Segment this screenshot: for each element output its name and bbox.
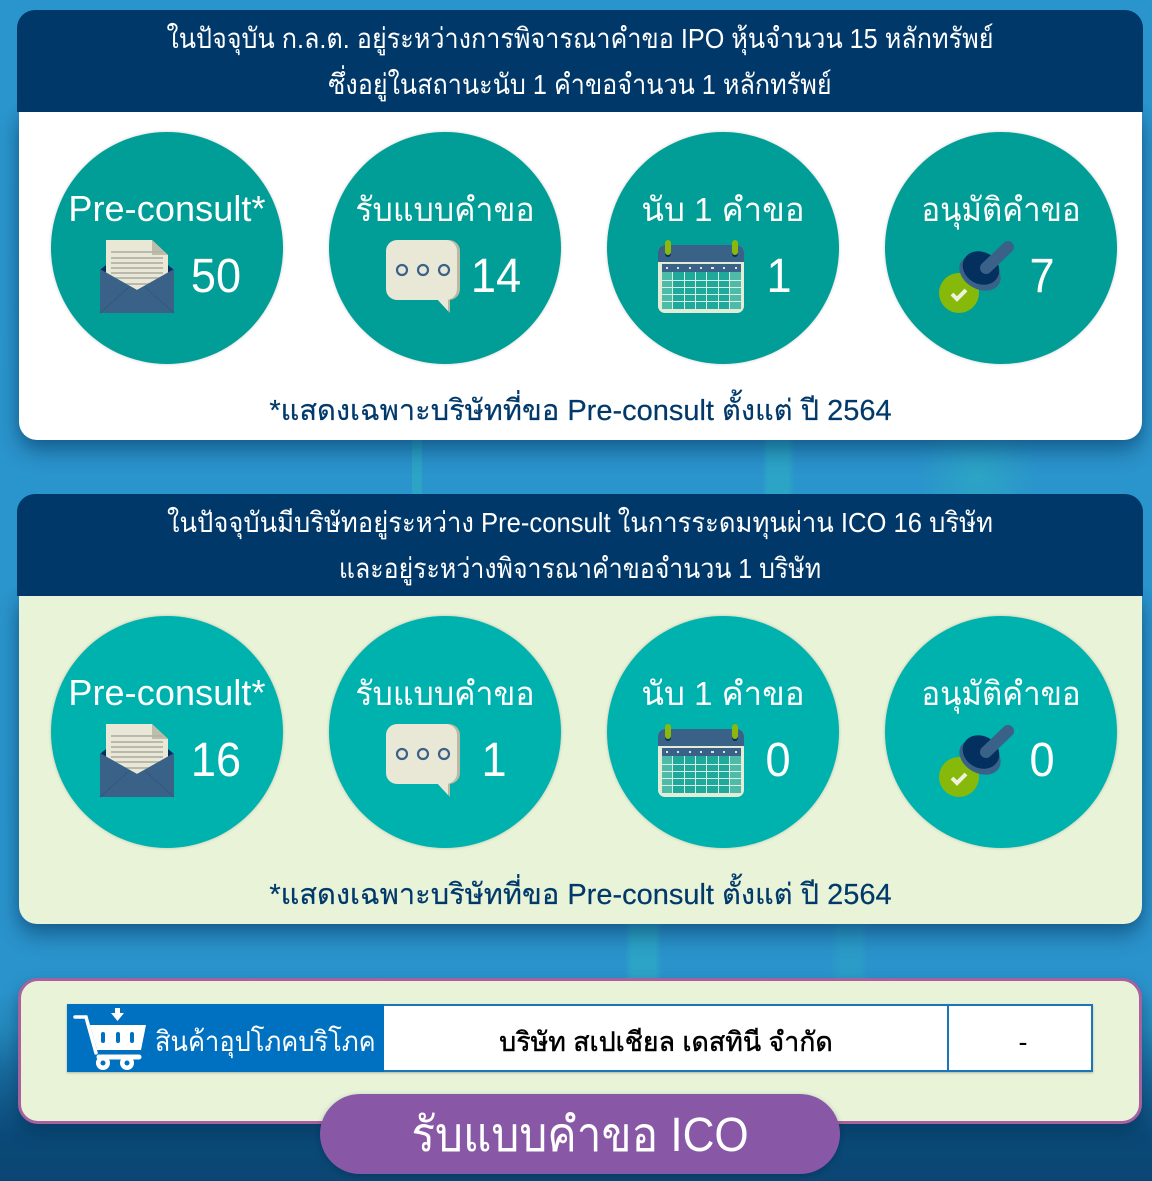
icon: shopping cart — [73, 1008, 146, 1070]
footnote: *แสดงเฉพาะบริษัทที่ขอ Pre-consult ตั้งแต่ ปี 2564 — [269, 879, 892, 911]
label: counted 1 filing: นับ 1 คำขอ — [641, 675, 805, 712]
value: 50: 50 — [191, 250, 241, 303]
label: approved: อนุมัติคำขอ — [921, 675, 1081, 712]
icon: speech bubble — [386, 240, 460, 313]
divider — [947, 1006, 949, 1070]
label: filing received: รับแบบคำขอ — [355, 191, 535, 228]
ICO panel body — [19, 596, 1142, 924]
value: 7: 7 — [1029, 250, 1055, 303]
circle: filing received — [329, 132, 561, 364]
circle: approved — [885, 616, 1117, 848]
IPO heading line 2: ซึ่งอยู่ในสถานะนับ 1 คำขอจำนวน 1 หลักทรัพย์ — [328, 69, 832, 100]
table row — [67, 1004, 1093, 1072]
value: 0: 0 — [765, 734, 791, 787]
value: 1: 1 — [766, 250, 792, 303]
company name: บริษัท สเปเชียล เดสทินี จำกัด — [499, 1027, 833, 1057]
icon: approval stamp — [939, 725, 1014, 797]
pill: ICO filings received — [320, 1094, 840, 1174]
label: filing received: รับแบบคำขอ — [355, 675, 535, 712]
ICO heading line 1: ในปัจจุบันมีบริษัทอยู่ระหว่าง Pre-consult ในการระดมทุนผ่าน ICO 16 บริษัท — [167, 507, 993, 538]
value: 14: 14 — [471, 250, 521, 303]
icon: calendar — [658, 724, 744, 797]
circle: counted 1 filing — [607, 132, 839, 364]
category cell — [67, 1004, 384, 1072]
icon: approval stamp — [939, 241, 1014, 313]
IPO header band — [17, 10, 1143, 112]
label: counted 1 filing: นับ 1 คำขอ — [641, 191, 805, 228]
icon: envelope — [100, 240, 174, 314]
ICO header band — [17, 494, 1143, 596]
circle: Pre-consult — [51, 132, 283, 364]
circle: counted 1 filing — [607, 616, 839, 848]
value: 0: 0 — [1029, 734, 1055, 787]
icon: speech bubble — [386, 724, 460, 797]
circle: approved — [885, 132, 1117, 364]
label: Pre-consult: Pre-consult* — [68, 672, 266, 713]
empty value dash: - — [1018, 1027, 1028, 1057]
value: 16: 16 — [191, 734, 241, 787]
panel: IPO — [8, 10, 1152, 462]
panel: filing table — [18, 978, 1142, 1124]
IPO panel body — [19, 112, 1142, 440]
value: 1: 1 — [481, 734, 507, 787]
category label: สินค้าอุปโภคบริโภค — [155, 1026, 376, 1057]
icon: calendar — [658, 240, 744, 313]
IPO heading line 1: ในปัจจุบัน ก.ล.ต. อยู่ระหว่างการพิจารณาคำขอ IPO หุ้นจำนวน 15 หลักทรัพย์ — [166, 23, 994, 54]
circle: Pre-consult — [51, 616, 283, 848]
label: Pre-consult: Pre-consult* — [68, 188, 266, 229]
circle: filing received — [329, 616, 561, 848]
footnote: *แสดงเฉพาะบริษัทที่ขอ Pre-consult ตั้งแต่ ปี 2564 — [269, 395, 892, 427]
label: approved: อนุมัติคำขอ — [921, 191, 1081, 228]
pill title: รับแบบคำขอ ICO — [411, 1109, 749, 1162]
icon: envelope — [100, 724, 174, 798]
panel: ICO — [8, 494, 1152, 946]
ICO heading line 2: และอยู่ระหว่างพิจารณาคำขอจำนวน 1 บริษัท — [339, 553, 821, 584]
